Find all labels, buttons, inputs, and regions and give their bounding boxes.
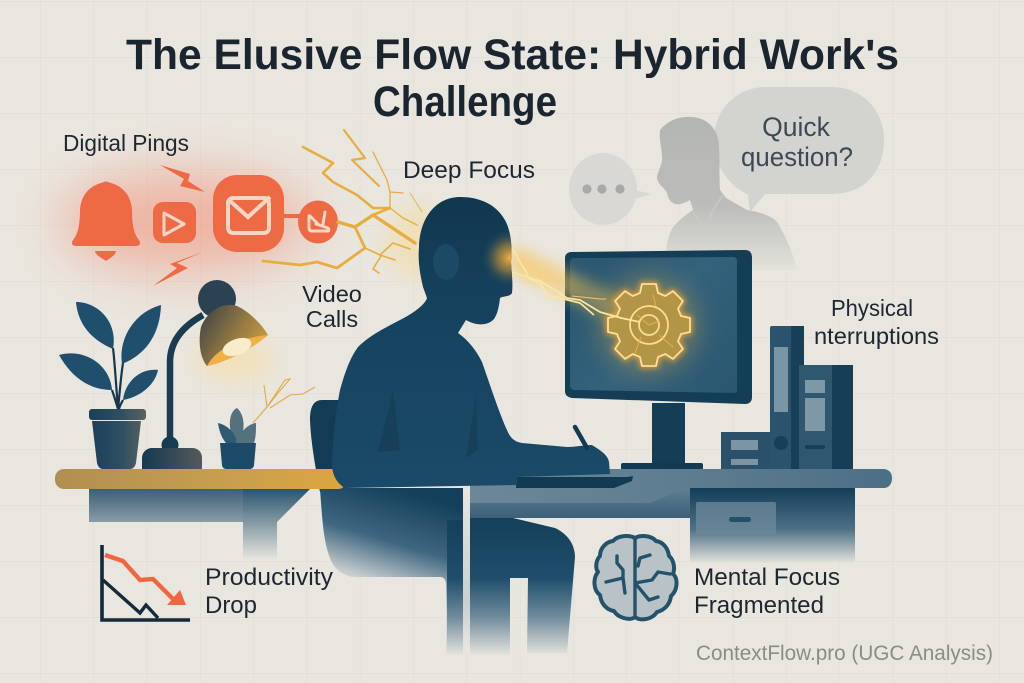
- focus beam: [512, 245, 640, 335]
- icon: notification bell: [72, 182, 140, 261]
- binders and box: [721, 326, 853, 470]
- wood desktop: [55, 469, 347, 489]
- title: Challenge: [373, 78, 557, 126]
- speech bubble: Quick question: [714, 87, 884, 212]
- small plant with crack: [218, 379, 315, 469]
- label: Mental Focus Fragmented: [694, 564, 840, 619]
- red glow behind digital pings: [60, 172, 310, 272]
- lamp head: [198, 280, 236, 318]
- crack: [253, 379, 315, 423]
- monitor frame: [565, 250, 752, 404]
- icon: video play: [153, 202, 196, 243]
- monitor: [565, 250, 752, 470]
- wide binder: [799, 365, 853, 470]
- monitor screen: [570, 257, 737, 393]
- yellow glow near head: [386, 206, 450, 278]
- under panel: [89, 489, 243, 522]
- yellow crack lines: [263, 130, 422, 273]
- small leaves: [218, 408, 256, 443]
- speech bubble: Quick question: Quick: [762, 112, 831, 142]
- lamp arm: [170, 315, 203, 445]
- left desk: [55, 469, 347, 560]
- speech bubble: ellipsis: [569, 153, 651, 225]
- drawer unit: [690, 488, 855, 563]
- plant stems: [112, 348, 123, 409]
- glowing gear: [599, 275, 699, 375]
- icon: lightning bolt lower: [153, 252, 203, 286]
- label: Digital Pings: Digital Pings: [63, 130, 189, 156]
- person silhouette: [332, 197, 610, 488]
- label: Video Calls: [302, 281, 362, 332]
- ear: [433, 244, 459, 280]
- speech bubble: Quick question: question?: [741, 142, 853, 172]
- desk surface: [470, 469, 892, 503]
- label: Mental Focus Fragmented: Fragmented: [694, 592, 824, 619]
- icon: lightning bolt upper: [160, 165, 205, 192]
- icon: fragmented brain: [594, 536, 677, 619]
- tall binder: [770, 326, 804, 470]
- label: Deep Focus: Deep Focus: [403, 157, 535, 184]
- collar: [693, 196, 722, 232]
- office chair: [310, 400, 470, 650]
- keyboard pad: [516, 476, 633, 488]
- chair seat: [320, 488, 470, 650]
- head highlight: [484, 232, 512, 284]
- lamp inner light: [207, 335, 268, 366]
- label: Mental Focus Fragmented: Mental Focus: [694, 564, 840, 591]
- pen: [575, 427, 587, 448]
- desk front: [470, 488, 690, 518]
- label: Productivity Drop: [205, 564, 334, 619]
- desk lamp: [142, 280, 275, 469]
- colleague silhouette: [657, 117, 797, 270]
- lamp base: [142, 436, 202, 469]
- label: Physical Interruptions: Physical: [831, 295, 913, 321]
- small box: [721, 432, 771, 470]
- connector line: [284, 214, 302, 218]
- desk leg: [243, 489, 310, 560]
- title: The Elusive Flow State: Hybrid Work's: [126, 31, 899, 79]
- small pot: [220, 443, 256, 469]
- bulb: [220, 334, 254, 360]
- icon: video call circle: [298, 200, 338, 244]
- label: Productivity Drop: Productivity: [205, 564, 334, 591]
- label: Productivity Drop: Drop: [205, 592, 257, 619]
- lamp light glow: [195, 338, 275, 382]
- plant pot: [89, 409, 146, 469]
- label: Physical Interruptions: nterruptions: [814, 323, 939, 349]
- chair back: [310, 400, 345, 492]
- title: [126, 31, 899, 126]
- divider strip: [463, 488, 470, 653]
- leaves: [59, 302, 161, 400]
- label: Physical Interruptions: [814, 295, 939, 349]
- icon: mail: [213, 175, 284, 252]
- label: Video Calls: Calls: [306, 306, 358, 332]
- lamp shade: [200, 305, 268, 366]
- source note: ContextFlow.pro (UGC Analysis): [696, 642, 993, 665]
- label: Video Calls: Video: [302, 281, 362, 307]
- lightning from head to gear: [509, 248, 640, 322]
- plant: [59, 302, 161, 469]
- right desk: [470, 469, 892, 563]
- arm shadow: [378, 390, 478, 458]
- person legs: [447, 518, 575, 655]
- icon: productivity drop chart: [102, 545, 190, 620]
- monitor stand: [621, 403, 703, 470]
